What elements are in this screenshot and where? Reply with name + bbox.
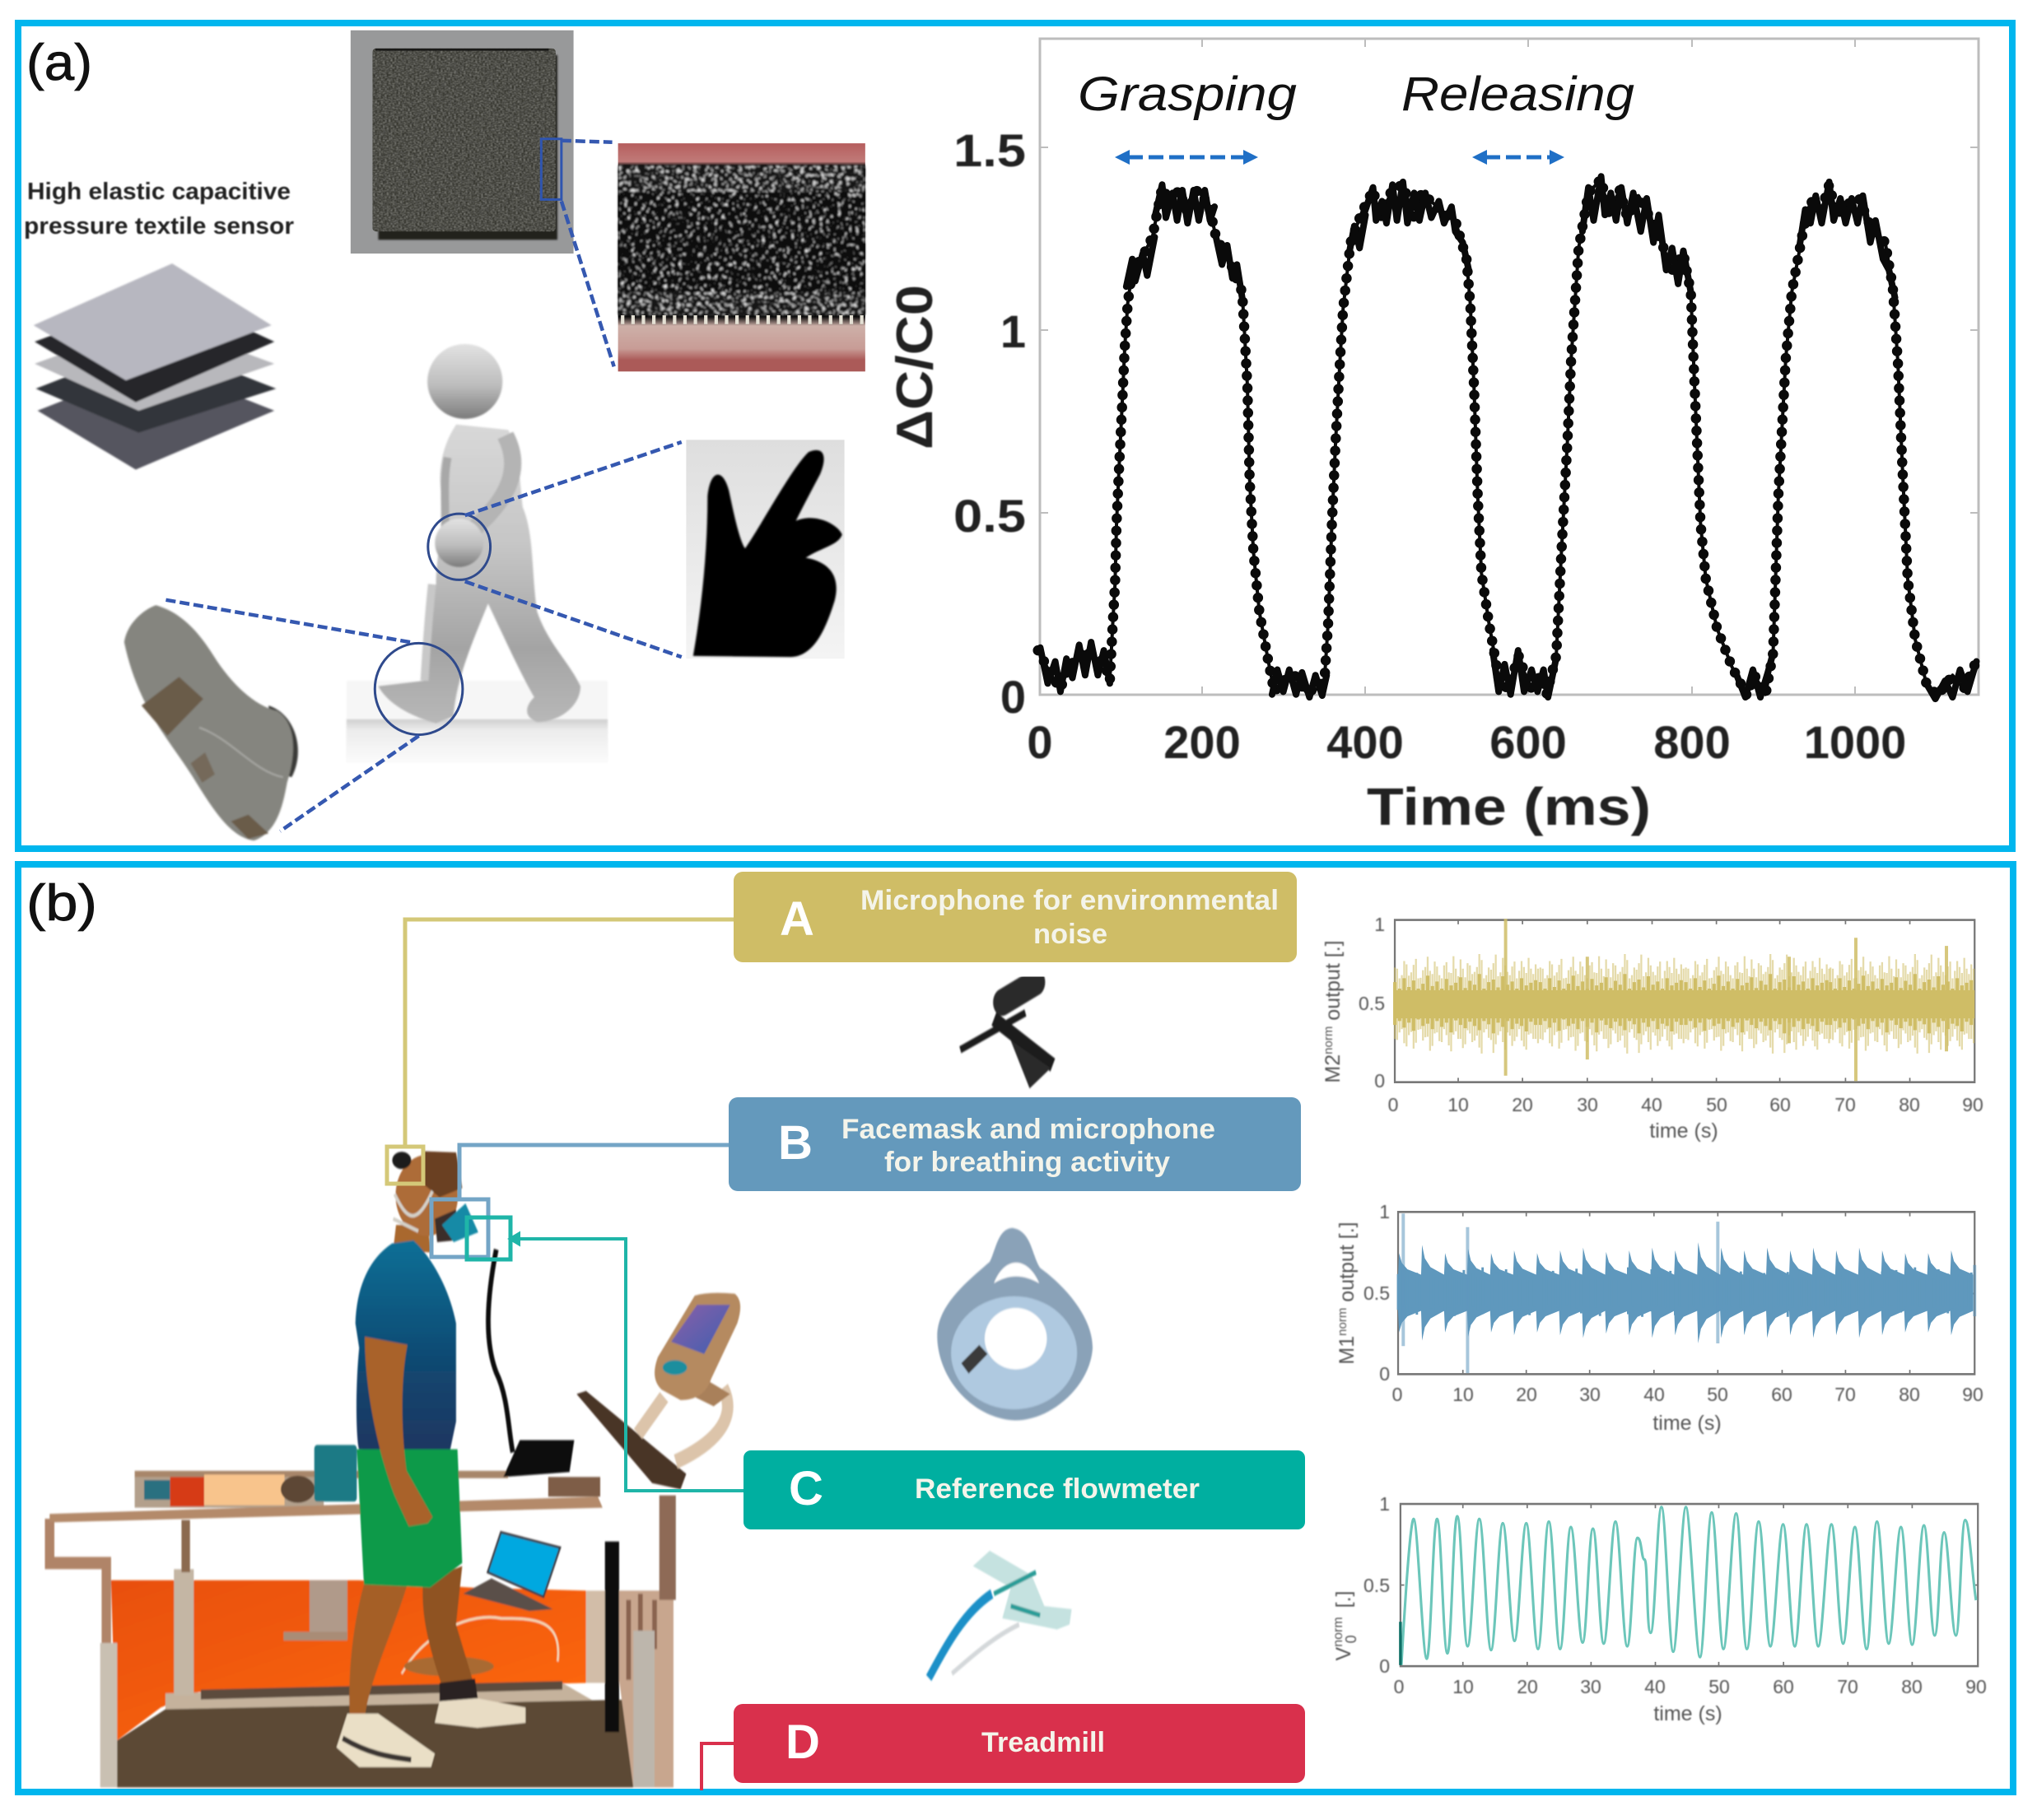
belt and side rail	[165, 1683, 605, 1711]
chart: reference flow signal: 0	[1343, 1635, 1359, 1643]
chart: M2 microphone signal: 0.5	[1359, 993, 1385, 1014]
arrow: releasing span	[1472, 150, 1564, 165]
box C	[743, 1450, 1305, 1529]
chart: M2 microphone signal: M2	[1321, 1054, 1345, 1083]
box C: C	[789, 1462, 823, 1515]
chart: reference flow signal: 0.5	[1363, 1575, 1390, 1596]
chart: M1 breathing signal: 30	[1579, 1384, 1601, 1405]
back shelf	[135, 1471, 508, 1478]
box B: Facemask and microphone	[841, 1114, 1215, 1145]
y tick labels: 1.5	[953, 124, 1026, 176]
chart: M1 breathing signal: 0	[1379, 1363, 1390, 1385]
box A: Microphone for environmental	[860, 885, 1279, 916]
chart: M1 breathing signal: norm	[1335, 1308, 1349, 1336]
y tick labels: 1	[1000, 305, 1026, 357]
box D	[734, 1704, 1305, 1783]
chart: reference flow signal: [.]	[1332, 1591, 1355, 1613]
connector: C flowmeter	[467, 1217, 745, 1491]
chart: M1 breathing signal: 0.5	[1363, 1282, 1390, 1304]
x tick labels: 200	[1163, 716, 1241, 768]
chart: M2 microphone signal: 0	[1388, 1094, 1398, 1115]
figure: walking person	[347, 344, 608, 762]
icon: lapel microphone	[960, 982, 1053, 1088]
chart: M1 breathing signal: 0	[1392, 1384, 1402, 1405]
chart: reference flow signal: 50	[1708, 1676, 1730, 1697]
sensor caption: High elastic capacitive	[27, 179, 291, 205]
chart: M2 microphone signal: time (s)	[1649, 1119, 1718, 1143]
sensor caption: pressure textile sensor	[24, 213, 294, 240]
panel label b: (b)	[26, 875, 97, 932]
chart: M2 microphone signal: 60	[1769, 1094, 1791, 1115]
box D: D	[785, 1715, 820, 1769]
chart: M1 breathing signal: time (s)	[1652, 1412, 1722, 1435]
box B	[729, 1097, 1301, 1191]
photo: sensorized sock	[124, 605, 298, 840]
y tick labels: 0	[1000, 671, 1026, 723]
arrows: zoom lines panel a	[165, 141, 682, 831]
chart: M2 microphone signal: 10	[1447, 1094, 1469, 1115]
chart: M1 breathing signal: 10	[1452, 1384, 1474, 1405]
chart: reference flow signal: time (s)	[1653, 1702, 1722, 1725]
icon: facemask	[937, 1228, 1093, 1421]
chart: reference flow signal: 1	[1379, 1493, 1390, 1515]
box A	[734, 872, 1297, 962]
arrow: grasping span	[1115, 150, 1258, 165]
y axis title: ΔC/C0	[887, 285, 944, 449]
photo: textile cross section	[618, 143, 865, 371]
x tick labels: 1000	[1804, 716, 1906, 768]
chart: M2 microphone signal	[1321, 914, 1983, 1143]
runner	[337, 1151, 525, 1767]
chart: M1 breathing signal: output [.]	[1335, 1222, 1359, 1308]
chart: M1 breathing signal: M1	[1335, 1336, 1359, 1365]
chart: M1 breathing signal: 80	[1899, 1384, 1920, 1405]
chart: M1 breathing signal: 20	[1516, 1384, 1537, 1405]
box B: for breathing activity	[884, 1147, 1170, 1178]
chart: M2 microphone signal: 1	[1374, 914, 1385, 935]
sensor caption	[24, 179, 294, 240]
icon: layered sensor stack	[34, 263, 276, 469]
chart: reference flow signal: V	[1332, 1647, 1355, 1660]
chart: M2 microphone signal: norm	[1321, 1026, 1335, 1054]
box A: noise	[1033, 919, 1107, 950]
chart: reference flow signal: 90	[1965, 1676, 1987, 1697]
x tick labels: 800	[1653, 716, 1731, 768]
chart: M1 breathing signal: 50	[1707, 1384, 1728, 1405]
chart: reference flow signal: 10	[1452, 1676, 1474, 1697]
chart: reference flow signal: 40	[1644, 1676, 1666, 1697]
photo: glove	[686, 440, 845, 659]
chart: M2 microphone signal: 90	[1962, 1094, 1983, 1115]
annotation: releasing: Releasing	[1401, 67, 1634, 121]
marker: blue box	[431, 1199, 488, 1257]
orange floor	[111, 1580, 586, 1741]
zoom box on textile	[541, 139, 562, 199]
chart: M1 breathing signal: 40	[1643, 1384, 1665, 1405]
chart: reference flow signal: 80	[1901, 1676, 1923, 1697]
panel label a: (a)	[26, 35, 92, 91]
x tick labels: 400	[1326, 716, 1404, 768]
icon: flowmeter	[929, 1551, 1072, 1678]
chart: M1 breathing signal: 1	[1379, 1201, 1390, 1222]
data trace	[1038, 176, 1976, 699]
chart: M1 breathing signal	[1335, 1201, 1983, 1435]
chart: M2 microphone signal: 70	[1834, 1094, 1856, 1115]
connector: D treadmill	[702, 1743, 735, 1790]
y tick labels	[953, 124, 1026, 723]
photo: textile sample	[351, 30, 574, 254]
chart: reference flow signal: 30	[1580, 1676, 1601, 1697]
circle: hand	[428, 514, 491, 580]
x tick labels: 0	[1027, 716, 1053, 768]
chart: M2 microphone signal: 0	[1374, 1070, 1385, 1092]
x axis title: Time (ms)	[1367, 777, 1651, 836]
chart: reference flow signal	[1331, 1493, 1987, 1725]
panel: b frame	[18, 864, 2013, 1792]
x tick labels	[1027, 716, 1906, 768]
chart: M2 microphone signal: 50	[1706, 1094, 1727, 1115]
box C: Reference flowmeter	[915, 1473, 1200, 1505]
chart: reference flow signal: 70	[1837, 1676, 1858, 1697]
panel: a frame	[18, 23, 2012, 849]
x tick labels: 600	[1489, 716, 1567, 768]
box B: B	[778, 1116, 813, 1170]
chart: reference flow signal: norm	[1331, 1617, 1345, 1647]
right frame	[619, 1590, 674, 1787]
chart: M2 microphone signal: 30	[1577, 1094, 1598, 1115]
marker: teal box	[467, 1217, 510, 1259]
chart: M2 microphone signal: 20	[1512, 1094, 1533, 1115]
chart: M2 microphone signal: 40	[1641, 1094, 1662, 1115]
box D: Treadmill	[981, 1727, 1105, 1758]
posts and front rail	[49, 1519, 106, 1649]
chart: reference flow signal: 60	[1773, 1676, 1794, 1697]
console	[576, 1391, 686, 1489]
marker: yellow box	[387, 1147, 423, 1184]
chart: M1 breathing signal: 70	[1834, 1384, 1856, 1405]
laptop	[464, 1578, 553, 1611]
scene: treadmill and runner	[49, 1151, 740, 1787]
box A: A	[780, 892, 814, 946]
chart: M2 microphone signal: output [.]	[1321, 940, 1345, 1026]
chart: reference flow signal: 0	[1394, 1676, 1404, 1697]
chart: reference flow signal: 20	[1517, 1676, 1538, 1697]
connector: A microphone	[387, 919, 735, 1184]
circle: foot	[375, 643, 463, 735]
axes box	[1040, 39, 1979, 695]
ground shadow	[347, 681, 608, 762]
chart: M2 microphone signal: 80	[1899, 1094, 1920, 1115]
y tick labels: 0.5	[953, 490, 1026, 542]
breathing cable	[488, 1250, 513, 1452]
connector: B facemask	[431, 1145, 729, 1257]
chart: reference flow signal: 0	[1379, 1655, 1390, 1677]
annotation: grasping: Grasping	[1078, 67, 1297, 121]
chart: M1 breathing signal: 90	[1962, 1384, 1983, 1405]
chart: capacitance vs time	[887, 39, 1979, 836]
chart: M1 breathing signal: 60	[1771, 1384, 1792, 1405]
